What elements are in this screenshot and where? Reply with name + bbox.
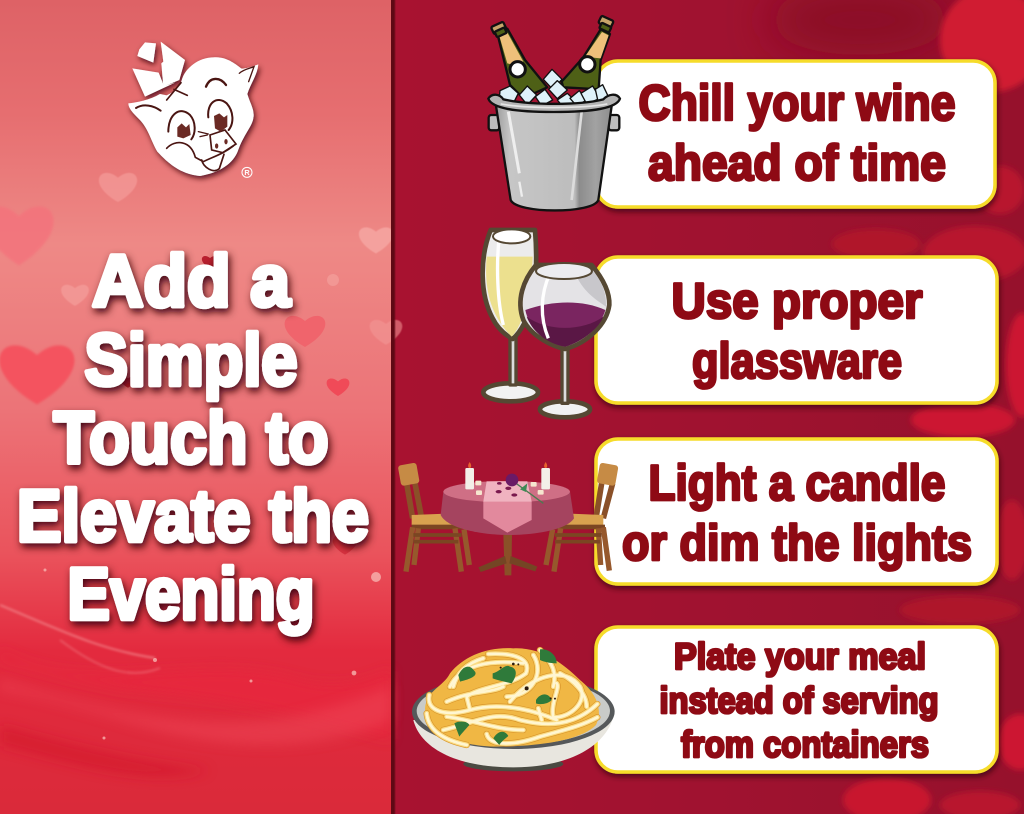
panel: right background: [390, 0, 1024, 814]
card text: from containers: [681, 724, 929, 765]
decorative hearts: [0, 173, 402, 555]
bucket body: [488, 95, 620, 210]
handles: [489, 115, 619, 130]
logo: pig: [128, 42, 258, 177]
icon: pasta plate: [412, 648, 615, 771]
plate: [412, 674, 615, 771]
card text: [672, 273, 922, 389]
pig pupils: [177, 113, 228, 149]
champagne flute: [483, 229, 538, 401]
card text: or dim the lights: [622, 515, 972, 571]
title: Touch to: [54, 398, 328, 479]
card text: Plate your meal: [674, 636, 926, 677]
left bottle: [491, 22, 547, 98]
card text: glassware: [692, 333, 902, 389]
card text: Use proper: [672, 273, 922, 329]
right bottle: [562, 16, 614, 89]
card: chill your wine: [596, 61, 995, 207]
parsley: [454, 649, 557, 745]
pig head and bow silhouette: [128, 42, 258, 176]
icon: dining table: [398, 462, 619, 575]
title: [17, 241, 369, 635]
title: Elevate the: [17, 476, 369, 557]
card text: [660, 636, 938, 765]
card text: [638, 75, 956, 191]
title: Evening: [68, 554, 314, 635]
left chair: [398, 463, 469, 572]
icon: wine glasses: [483, 229, 609, 417]
card text: Chill your wine: [638, 75, 956, 131]
panel: left background: [0, 0, 402, 814]
ice cubes: [499, 69, 609, 107]
title: Simple: [84, 320, 298, 401]
card: proper glassware: [596, 257, 997, 403]
card text: [622, 455, 972, 571]
pepper specks: [500, 663, 556, 700]
card: candle: [596, 439, 997, 584]
card: plate your meal: [596, 627, 997, 772]
pasta mound: [425, 648, 599, 747]
pig facial linework: [136, 67, 254, 171]
tablecloth: [441, 481, 574, 535]
decorative waves: [0, 605, 391, 777]
card text: instead of serving: [660, 680, 938, 721]
decorative particles: [44, 274, 381, 740]
candles: [465, 462, 550, 495]
panel edge: [391, 0, 396, 814]
icon: champagne bucket: [488, 16, 620, 210]
table pedestal: [478, 533, 537, 575]
right chair: [546, 463, 619, 572]
card text: Light a candle: [648, 455, 946, 511]
title: Add a: [92, 241, 291, 322]
red wine glass: [520, 263, 609, 417]
card text: ahead of time: [648, 135, 946, 191]
noodles: [427, 650, 597, 745]
rose: [496, 474, 543, 503]
registered mark: R: [244, 168, 250, 177]
